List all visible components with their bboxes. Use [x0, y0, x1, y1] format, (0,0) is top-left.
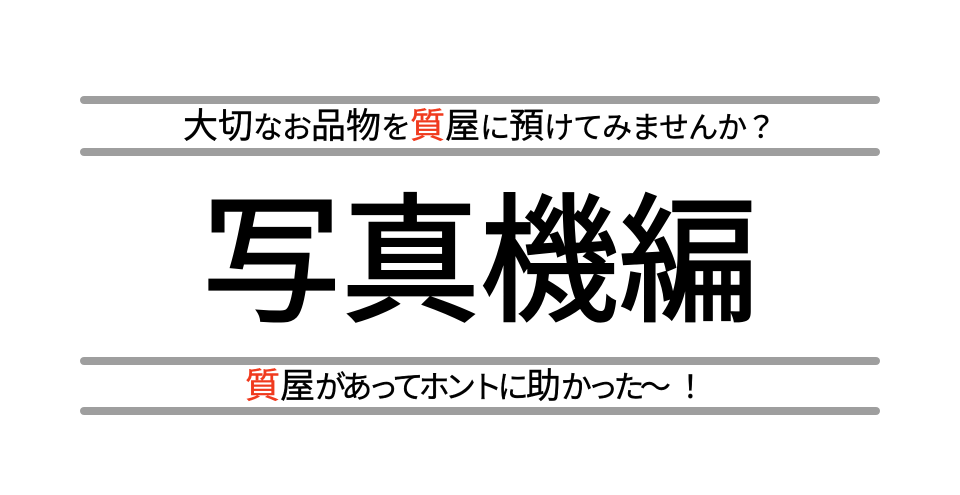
- top tagline: 大切なお品物を質屋に預けてみませんか？: [183, 107, 775, 146]
- bottom rule lower: [80, 407, 880, 415]
- bottom rule upper: [80, 357, 880, 365]
- top rule lower: [80, 148, 880, 156]
- top rule upper: [80, 96, 880, 104]
- main title: 写真機編: [202, 185, 758, 340]
- bottom tagline: 質屋があってホントに助かった～！: [245, 367, 706, 406]
